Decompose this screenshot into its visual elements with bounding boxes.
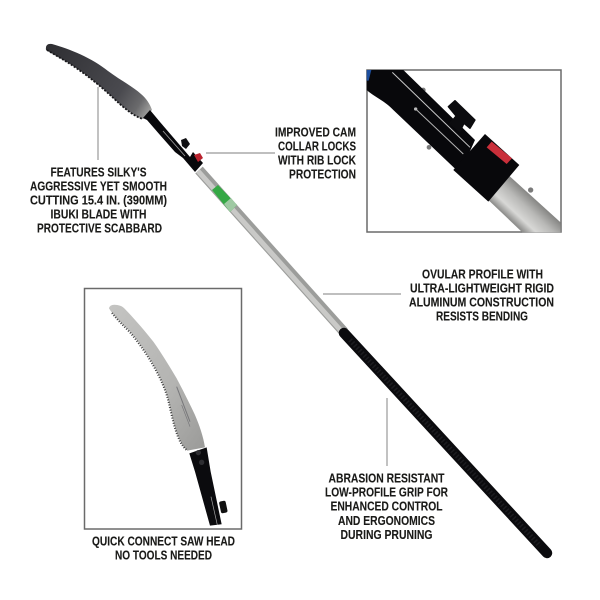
text: blade feature: FEATURES SILKY'S bbox=[50, 166, 146, 180]
green label bbox=[212, 185, 237, 212]
saw tool: full product bbox=[46, 44, 547, 553]
text: pole feature: ULTRA-LIGHTWEIGHT RIGID bbox=[410, 282, 554, 296]
collar bbox=[453, 134, 519, 202]
text: pole feature bbox=[409, 268, 554, 324]
text: pole feature: OVULAR PROFILE WITH bbox=[422, 268, 543, 282]
text: collar feature bbox=[275, 126, 356, 182]
text: grip feature: ABRASION RESISTANT bbox=[328, 472, 445, 486]
teeth bbox=[112, 313, 187, 450]
text: blade feature: PROTECTIVE SCABBARD bbox=[37, 222, 162, 236]
inset panel: cam collar closeup bbox=[367, 70, 562, 233]
text: quick connect: QUICK CONNECT SAW HEAD bbox=[92, 534, 235, 548]
knob bbox=[181, 138, 190, 149]
text: collar feature: COLLAR LOCKS bbox=[278, 140, 356, 154]
callout line: grip bbox=[386, 398, 388, 466]
callout line: blade bbox=[97, 87, 99, 160]
silver tube bbox=[488, 175, 562, 233]
blade in scabbard bbox=[46, 44, 152, 119]
text: quick connect bbox=[92, 534, 235, 562]
callout line: pole bbox=[323, 293, 401, 295]
blade markings bbox=[177, 387, 190, 427]
red button bbox=[487, 142, 512, 164]
handle bbox=[189, 447, 222, 526]
text: grip feature: AND ERGONOMICS bbox=[338, 514, 435, 528]
text: collar feature: IMPROVED CAM bbox=[275, 126, 356, 140]
red lock bbox=[194, 153, 203, 162]
knob bbox=[448, 101, 475, 132]
text: quick connect: NO TOOLS NEEDED bbox=[115, 548, 212, 562]
grip: black handle bbox=[344, 333, 547, 553]
text: blade feature: IBUKI BLADE WITH bbox=[50, 208, 146, 222]
text: grip feature: DURING PRUNING bbox=[340, 528, 433, 542]
knob bbox=[219, 500, 228, 514]
text: pole feature: ALUMINUM CONSTRUCTION bbox=[409, 296, 554, 310]
text: grip feature bbox=[325, 472, 448, 542]
screws bbox=[421, 88, 533, 193]
blade teeth edge bbox=[47, 50, 143, 119]
text: blade feature bbox=[30, 166, 167, 236]
black handle body bbox=[367, 70, 475, 173]
pole: silver aluminum shaft bbox=[198, 170, 344, 333]
inset panel: quick connect saw head bbox=[84, 288, 242, 529]
text: blade feature: AGGRESSIVE YET SMOOTH bbox=[30, 180, 167, 194]
text: pole feature: RESISTS BENDING bbox=[436, 310, 528, 324]
text: blade feature: CUTTING 15.4 IN. (390MM) bbox=[30, 194, 167, 208]
text: grip feature: LOW-PROFILE GRIP FOR bbox=[325, 486, 448, 500]
callout line: collar bbox=[206, 152, 275, 154]
saw head: black mount bbox=[143, 110, 203, 172]
text: collar feature: WITH RIB LOCK bbox=[278, 154, 356, 168]
blade bbox=[109, 305, 205, 451]
text: grip feature: ENHANCED CONTROL bbox=[330, 500, 443, 514]
text: collar feature: PROTECTION bbox=[289, 168, 356, 182]
